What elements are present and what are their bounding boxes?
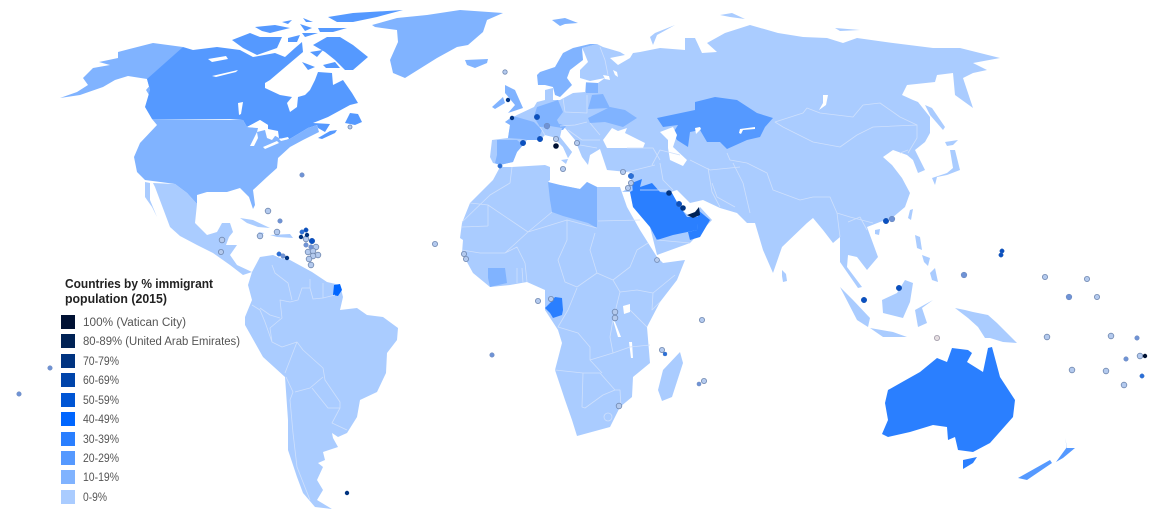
dots: 10-29% bbox=[17, 123, 1139, 396]
island: Philippines bbox=[915, 235, 938, 282]
legend row: 100%: 100% (Vatican City) bbox=[83, 317, 186, 329]
seas and lakes bbox=[603, 70, 828, 148]
legend row: 40-49% bbox=[61, 412, 119, 426]
legend row: 10-19% bbox=[61, 470, 119, 484]
continent outline bbox=[490, 25, 1000, 288]
region: Oceania bbox=[882, 347, 1075, 480]
region: Southeast Asia bbox=[840, 235, 1017, 343]
country: France bbox=[505, 116, 542, 140]
island: Svalbard bbox=[552, 18, 578, 26]
Arctic islands: Novaya Zemlya and Severnaya Zemlya bbox=[650, 13, 860, 45]
country: Alaska bbox=[60, 43, 183, 113]
lakes of Canada bbox=[208, 56, 243, 115]
island: Ireland bbox=[492, 97, 505, 109]
island: Sri Lanka bbox=[782, 270, 787, 282]
Asian borders bbox=[627, 103, 917, 243]
country: New Zealand bbox=[1018, 438, 1075, 480]
island: Sakhalin bbox=[925, 105, 945, 130]
legend title: Countries by % immigrant bbox=[65, 277, 214, 291]
legend row: 20-29% bbox=[61, 451, 119, 465]
legend title: population (2015) bbox=[65, 292, 167, 306]
country: Australia bbox=[882, 347, 1015, 452]
country: Oman bbox=[688, 210, 710, 240]
country: Canada bbox=[145, 10, 403, 140]
South American borders bbox=[252, 265, 347, 500]
legend row: 30-39% bbox=[61, 432, 119, 446]
dots: 30-49% bbox=[277, 164, 1144, 378]
country: Greenland bbox=[372, 10, 503, 78]
Caspian, Aral Sea and Balkhash bbox=[660, 127, 755, 166]
country: French Guiana bbox=[333, 284, 342, 296]
Great Lakes bbox=[247, 120, 289, 149]
country: United States bbox=[134, 119, 319, 209]
legend row: 70-79% bbox=[61, 354, 119, 368]
country: Libya bbox=[548, 182, 597, 228]
Caribbean islands bbox=[240, 218, 293, 238]
country: Jordan and Lebanon bbox=[632, 179, 642, 193]
African borders bbox=[462, 167, 675, 421]
legend bbox=[61, 277, 240, 504]
island: Japan bbox=[932, 140, 960, 185]
legend row: 20-29%: 20-29% bbox=[83, 453, 119, 465]
legend row: 0-9% bbox=[61, 490, 107, 504]
country: Baja California bbox=[145, 182, 157, 217]
legend row: 50-59%: 50-59% bbox=[83, 395, 119, 407]
legend row: 50-59% bbox=[61, 393, 119, 407]
country: Gabon bbox=[545, 297, 563, 318]
dots: 70-89% bbox=[285, 98, 686, 495]
country: Saudi Arabia bbox=[630, 183, 698, 240]
country: Kazakhstan bbox=[657, 97, 773, 149]
island: Madagascar bbox=[658, 352, 683, 401]
island: United Kingdom bbox=[505, 85, 523, 113]
region: South America bbox=[245, 255, 398, 509]
continent outline bbox=[460, 165, 685, 436]
country: Belarus bbox=[588, 94, 610, 109]
island: Borneo bbox=[882, 280, 913, 318]
country: United Arab Emirates bbox=[687, 207, 700, 218]
island: Sumatra bbox=[840, 287, 870, 327]
country: Estonia and Latvia bbox=[586, 83, 598, 93]
island: Sulawesi bbox=[915, 300, 933, 327]
region: North America bbox=[60, 10, 403, 275]
legend row: 0-9%: 0-9% bbox=[83, 492, 107, 504]
dots: 0-9% bbox=[218, 70, 1143, 409]
island: Tasmania bbox=[963, 457, 977, 469]
island: Java bbox=[870, 328, 907, 337]
European borders bbox=[540, 47, 608, 148]
country: Ivory Coast bbox=[488, 268, 507, 287]
dots: 100% and highest bbox=[553, 143, 1147, 358]
legend row: 60-69%: 60-69% bbox=[83, 375, 119, 387]
country: Austria bbox=[543, 124, 566, 130]
country: Ukraine bbox=[588, 107, 637, 127]
island: Sicily and Sardinia bbox=[561, 159, 568, 164]
region: Africa bbox=[460, 165, 685, 436]
legend row: 60-69% bbox=[61, 373, 119, 387]
legend row: 70-79%: 70-79% bbox=[83, 356, 119, 368]
country: Iceland bbox=[465, 59, 488, 68]
legend row: 40-49%: 40-49% bbox=[83, 414, 119, 426]
country: Germany and neighbours bbox=[534, 100, 563, 127]
dots: 50-69% bbox=[304, 114, 1004, 303]
island: Hainan bbox=[875, 229, 880, 235]
island: Italy bbox=[545, 126, 572, 158]
legend row: 100% bbox=[61, 315, 186, 329]
legend row: 30-39%: 30-39% bbox=[83, 434, 119, 446]
continent outline bbox=[245, 255, 398, 509]
country: Spain bbox=[495, 140, 523, 165]
region: Eurasia bbox=[490, 13, 1000, 288]
legend row: 80-89%: 80-89% (United Arab Emirates) bbox=[83, 336, 240, 348]
island: New Guinea bbox=[955, 308, 1017, 343]
country: Sweden and Norway bbox=[537, 44, 597, 97]
island: Taiwan bbox=[908, 209, 913, 220]
legend row: 10-19%: 10-19% bbox=[83, 472, 119, 484]
country: Mexico and Central America bbox=[153, 183, 252, 275]
African lakes bbox=[613, 304, 633, 358]
